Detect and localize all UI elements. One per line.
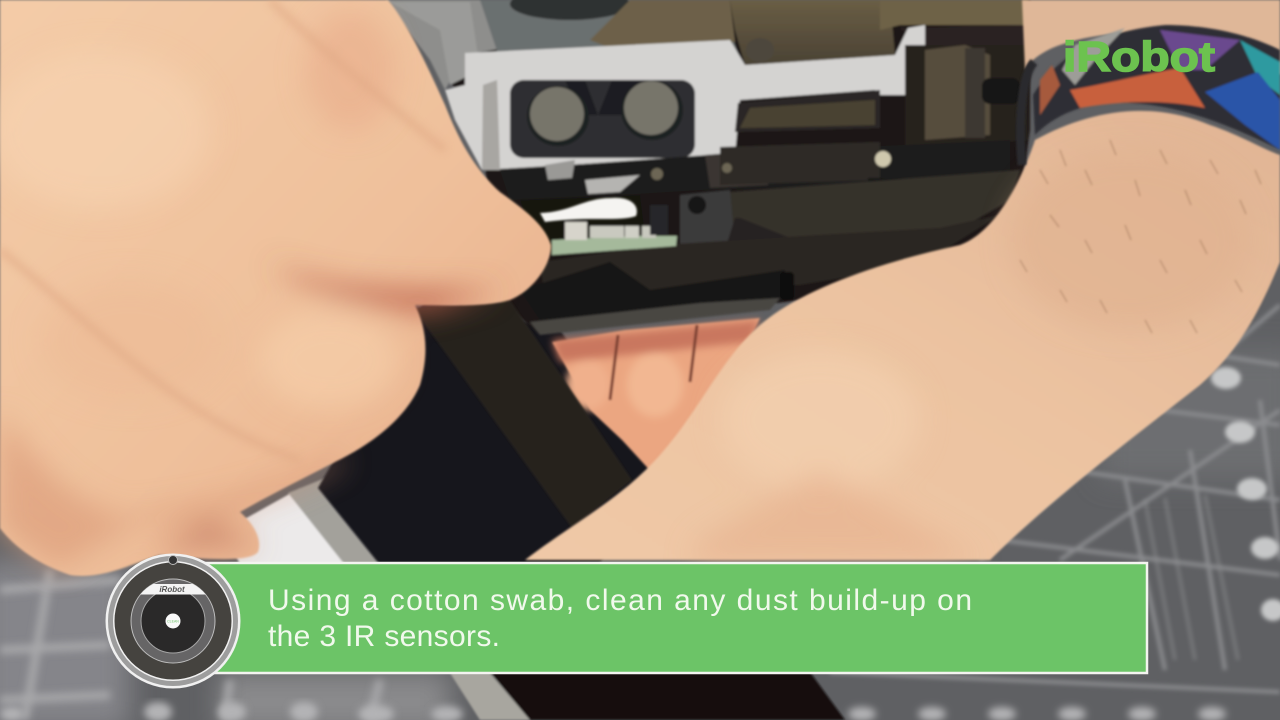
right hand and forearm: [525, 111, 1280, 562]
white logo band: [140, 584, 206, 594]
lower dark curved body: [540, 215, 1000, 300]
textured right block: [905, 45, 1028, 150]
robot underside: dark bin: [318, 300, 660, 565]
caption banner: [200, 563, 1147, 673]
cotton swab: [540, 198, 637, 222]
white paper and robot bumper edge: [225, 478, 845, 720]
dusty mid body: [690, 170, 1020, 260]
caption text: Using a cotton swab, clean any dust build-up on: [268, 584, 972, 617]
left hand: [0, 0, 551, 576]
IR sensor housing: [510, 80, 695, 158]
colourful wristband: [1020, 25, 1280, 165]
black bumper strip held in hand: [413, 300, 632, 528]
iRobot watermark logo: iRobot: [1063, 33, 1215, 80]
metal bracket: [445, 25, 925, 170]
caption text: the 3 IR sensors.: [268, 620, 500, 653]
icon: Roomba robot top view: CLEAN: [167, 620, 179, 624]
pink fingers behind the robot: [552, 318, 760, 476]
IR sensor circuit board: [552, 236, 677, 255]
icon: Roomba robot top view: iRobot: [159, 585, 185, 594]
wrist above the band: [1022, 0, 1280, 75]
cliff sensor box: [735, 90, 880, 132]
robot chassis: [385, 0, 1030, 335]
sensor recess: [520, 195, 645, 255]
icon: Roomba robot top view: [106, 554, 240, 688]
rail: [500, 140, 1010, 200]
